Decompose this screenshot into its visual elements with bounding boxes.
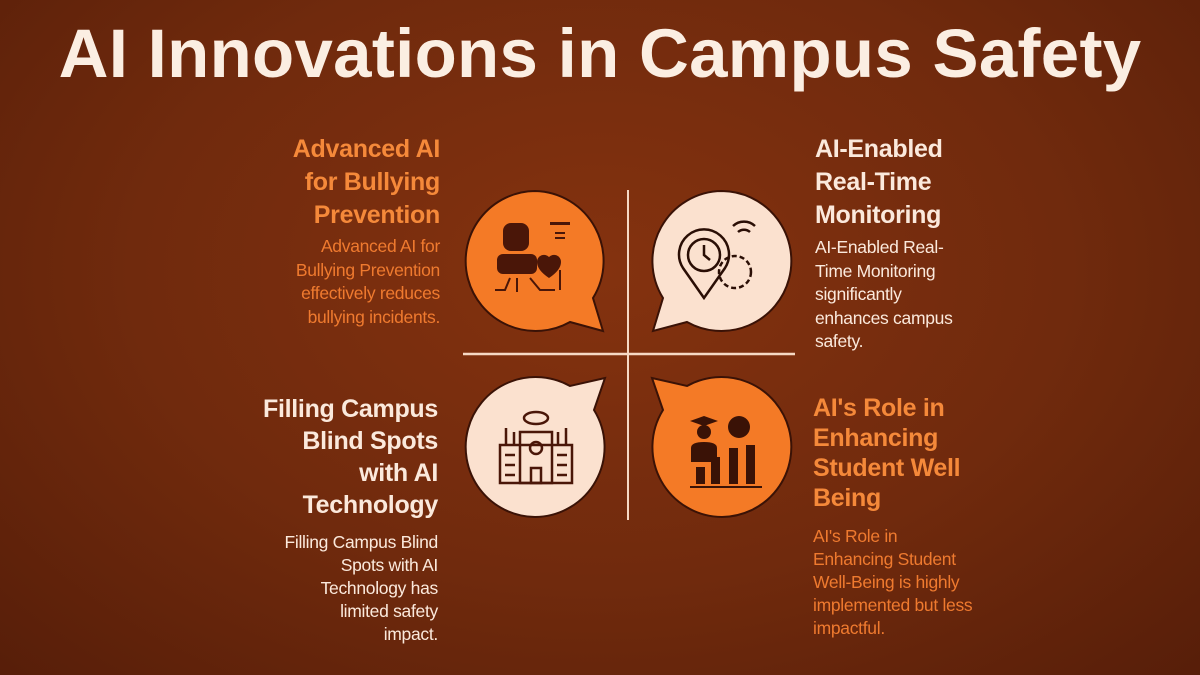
text block: blind spots: impact. [384,624,438,644]
text block: bullying prevention: for Bullying [305,168,440,196]
text block: student well-being: Enhancing [813,424,938,452]
text block: student well-being: implemented but less [813,595,972,615]
bubble: monitoring icon [652,191,791,331]
text block: student well-being: Being [813,484,881,512]
text block: blind spots: Filling Campus [263,395,438,423]
text block: student well-being: impactful. [813,618,885,638]
text block: real-time monitoring: Real-Time [815,168,931,196]
text block: student well-being [813,394,972,638]
text block: blind spots [263,395,438,644]
text block: blind spots: Spots with AI [341,555,438,575]
text block: blind spots: Technology has [321,578,438,598]
text block: real-time monitoring: AI-Enabled Real- [815,237,943,257]
text block: real-time monitoring: safety. [815,331,863,351]
text block: blind spots: Filling Campus Blind [284,532,438,552]
text block: bullying prevention: effectively reduces [301,283,440,303]
text block: student well-being: AI's Role in [813,526,897,546]
text block: bullying prevention: Advanced AI for [321,236,440,256]
text block: bullying prevention: bullying incidents. [308,306,440,326]
text block: real-time monitoring: Monitoring [815,201,941,229]
text block: real-time monitoring: significantly [815,284,902,304]
text block: bullying prevention: Advanced AI [293,135,440,163]
text block: bullying prevention: Bullying Prevention [296,260,440,280]
text block: real-time monitoring: enhances campus [815,308,953,328]
text block: blind spots: Blind Spots [302,427,438,455]
bubble: blind spots icon [466,377,605,517]
text block: blind spots: limited safety [340,601,438,621]
bubble: bullying icon [466,191,604,331]
text block: student well-being: AI's Role in [813,394,945,422]
bubble: well-being icon [652,377,791,517]
text block: real-time monitoring: AI-Enabled [815,135,943,163]
text block: bullying prevention: Prevention [314,201,440,229]
text block: real-time monitoring: Time Monitoring [815,260,935,280]
text block: blind spots: with AI [359,459,438,487]
text block: blind spots: Technology [303,491,438,519]
title: AI Innovations in Campus Safety [59,15,1141,92]
text block: student well-being: Student Well [813,454,960,482]
text block: real-time monitoring [815,135,953,351]
text block: bullying prevention [293,135,440,326]
text block: student well-being: Well-Being is highly [813,572,959,592]
text block: student well-being: Enhancing Student [813,549,956,569]
